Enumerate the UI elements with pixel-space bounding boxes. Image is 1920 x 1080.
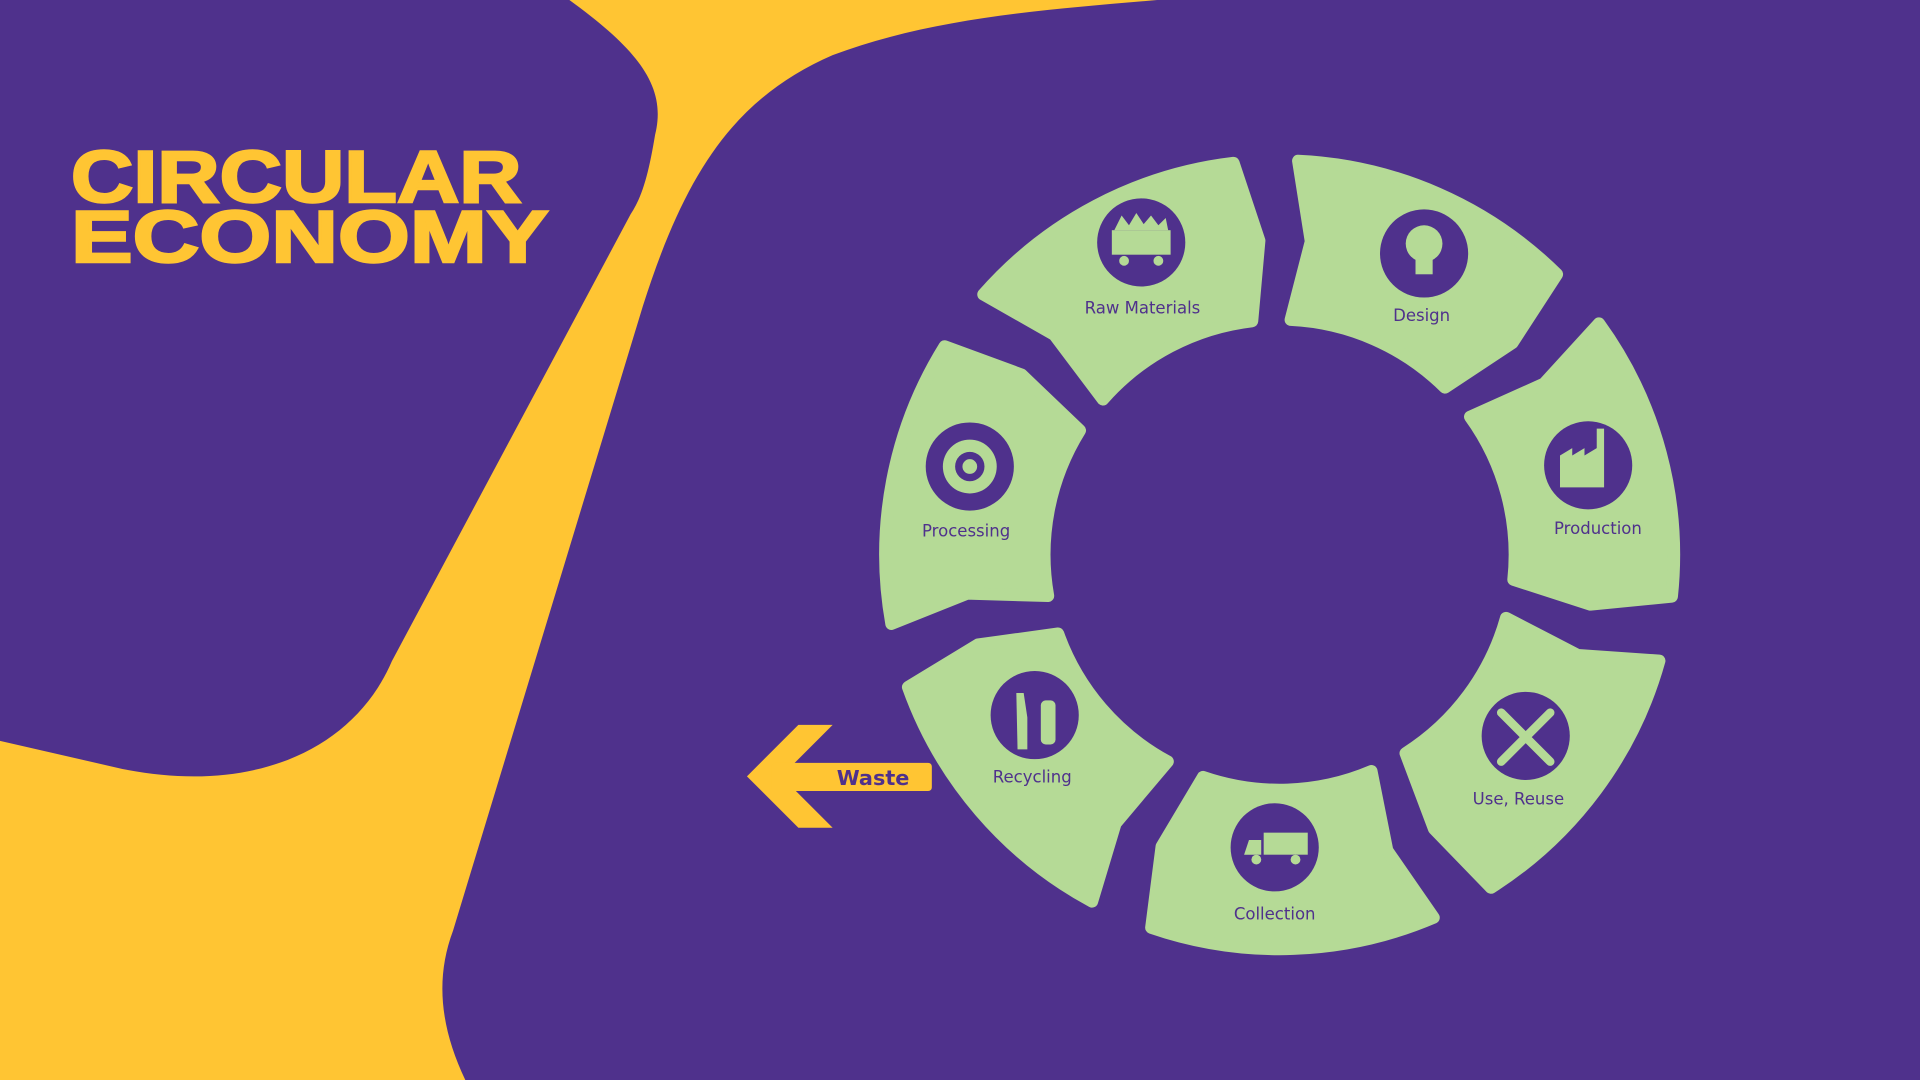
title: ECONOMY	[71, 195, 549, 278]
stage: use reuse	[1473, 692, 1570, 808]
stage: recycling: Recycling	[993, 767, 1072, 786]
stage: raw materials: Raw Materials	[1085, 298, 1200, 317]
title	[71, 135, 549, 278]
stage: design: Design	[1393, 306, 1450, 325]
stage: production: Production	[1554, 519, 1642, 538]
stage: production	[1544, 421, 1642, 538]
title: CIRCULAR	[71, 135, 522, 218]
yellow background band	[0, 0, 1157, 1080]
stage: collection	[1231, 803, 1319, 924]
stage: collection: Collection	[1234, 905, 1316, 924]
stage: recycling	[991, 671, 1079, 786]
stage: processing: Processing	[922, 521, 1010, 540]
waste arrow: Waste	[837, 766, 909, 790]
stage: design	[1380, 209, 1468, 325]
waste arrow	[747, 725, 932, 828]
stage: raw materials	[1085, 198, 1200, 317]
stage: processing	[922, 422, 1014, 540]
stage: use reuse: Use, Reuse	[1473, 789, 1564, 808]
cycle diagram	[861, 133, 1693, 949]
